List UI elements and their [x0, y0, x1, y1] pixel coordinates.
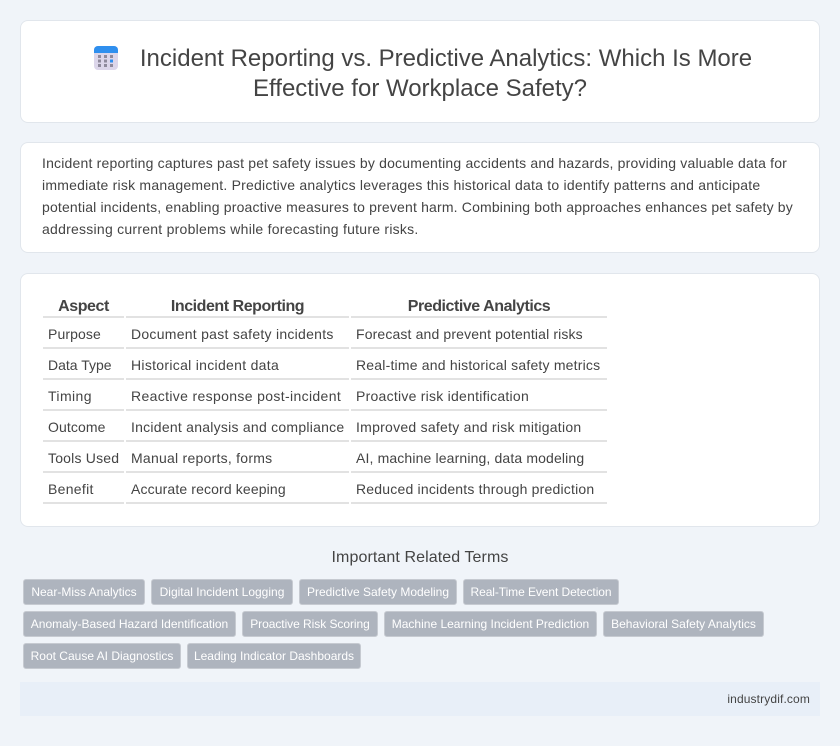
tag: Machine Learning Incident Prediction — [392, 617, 589, 631]
tag: Predictive Safety Modeling — [307, 585, 449, 599]
row: Outcome: Improved safety and risk mitigation — [356, 419, 581, 435]
intro text: Incident reporting captures past pet safety issues by documenting accidents and hazards, providing valuable data for — [42, 155, 787, 171]
row: Timing: Timing — [48, 388, 92, 404]
row: Tools Used: AI, machine learning, data modeling — [356, 450, 584, 466]
row: Benefit: Accurate record keeping — [131, 481, 286, 497]
row: Benefit: Benefit — [48, 481, 94, 497]
tag — [603, 611, 764, 637]
table header — [43, 298, 607, 318]
tag — [384, 611, 597, 637]
related terms tags — [23, 579, 764, 669]
tag — [463, 579, 619, 605]
row: Benefit — [43, 481, 607, 504]
row: Data Type: Real-time and historical safety metrics — [356, 357, 600, 373]
title — [140, 45, 752, 102]
row: Data Type — [43, 357, 607, 380]
row: Purpose: Forecast and prevent potential risks — [356, 326, 583, 342]
intro text: immediate risk management. Predictive analytics leverages this historical data to identify patterns and anticipate — [42, 177, 760, 193]
tag — [187, 643, 361, 669]
title: Incident Reporting vs. Predictive Analytics: Which Is More — [140, 45, 752, 72]
row: Outcome — [43, 419, 607, 442]
intro panel — [20, 142, 820, 253]
footer bar — [20, 682, 820, 716]
row: Purpose: Purpose — [48, 326, 101, 342]
intro text — [42, 155, 793, 237]
tag: Proactive Risk Scoring — [250, 617, 370, 631]
related terms heading: Important Related Terms — [332, 549, 508, 566]
tag: Real-Time Event Detection — [471, 585, 611, 599]
row: Tools Used: Tools Used — [48, 450, 119, 466]
icon: calendar — [94, 46, 118, 70]
row: Data Type: Data Type — [48, 357, 112, 373]
row: Outcome: Incident analysis and compliance — [131, 419, 344, 435]
comparison table panel — [20, 273, 820, 527]
tag — [23, 643, 181, 669]
row: Benefit: Reduced incidents through prediction — [356, 481, 594, 497]
row: Tools Used: Manual reports, forms — [131, 450, 272, 466]
row: Timing: Reactive response post-incident — [131, 388, 341, 404]
row: Timing: Proactive risk identification — [356, 388, 529, 404]
row: Data Type: Historical incident data — [131, 357, 279, 373]
table header: Incident Reporting — [171, 298, 304, 315]
row: Purpose — [43, 326, 607, 349]
row: Timing — [43, 388, 607, 411]
table header: Predictive Analytics — [408, 298, 550, 315]
row: Purpose: Document past safety incidents — [131, 326, 334, 342]
comparison table — [43, 298, 607, 504]
tag: Near-Miss Analytics — [31, 585, 137, 599]
intro text: potential incidents, enabling proactive measures to prevent harm. Combining both approaches enhances pet safety by — [42, 199, 793, 215]
footer credit: industrydif.com — [727, 692, 810, 706]
row: Tools Used — [43, 450, 607, 473]
title: Effective for Workplace Safety? — [253, 75, 587, 102]
intro text: addressing current problems while forecasting future risks. — [42, 221, 419, 237]
table header: Aspect — [58, 298, 109, 315]
tag: Leading Indicator Dashboards — [194, 649, 354, 663]
tag — [242, 611, 378, 637]
tag: Behavioral Safety Analytics — [611, 617, 756, 631]
tag — [23, 611, 236, 637]
tag — [151, 579, 293, 605]
tag: Anomaly-Based Hazard Identification — [31, 617, 228, 631]
tag: Digital Incident Logging — [160, 585, 284, 599]
header card — [20, 20, 820, 123]
tag — [299, 579, 457, 605]
tag: Root Cause AI Diagnostics — [31, 649, 173, 663]
row: Outcome: Outcome — [48, 419, 106, 435]
tag — [23, 579, 145, 605]
